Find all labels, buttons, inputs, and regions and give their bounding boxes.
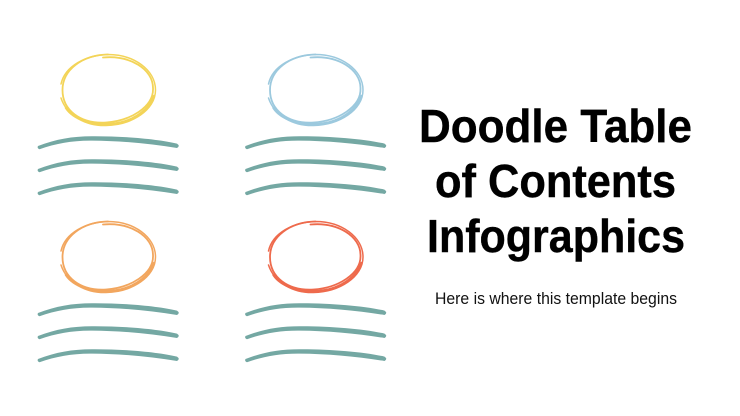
panel: red item bbox=[245, 222, 386, 362]
icon: red doodle circle bbox=[268, 222, 363, 293]
panel: blue item bbox=[245, 54, 386, 195]
icon: yellow doodle circle bbox=[61, 54, 156, 126]
title: Doodle Table bbox=[419, 100, 692, 152]
title: of Contents bbox=[435, 155, 676, 207]
lines: text placeholder strokes bbox=[38, 303, 179, 362]
panel: orange item bbox=[38, 222, 179, 362]
panel: yellow item bbox=[38, 54, 179, 195]
lines: text placeholder strokes bbox=[245, 136, 386, 195]
lines: text placeholder strokes bbox=[38, 136, 179, 195]
subtitle: Here is where this template begins bbox=[435, 290, 677, 308]
title: Infographics bbox=[427, 210, 685, 262]
lines: text placeholder strokes bbox=[245, 303, 386, 362]
icon: blue doodle circle bbox=[268, 54, 363, 126]
icon: orange doodle circle bbox=[61, 222, 156, 293]
title bbox=[419, 100, 692, 262]
